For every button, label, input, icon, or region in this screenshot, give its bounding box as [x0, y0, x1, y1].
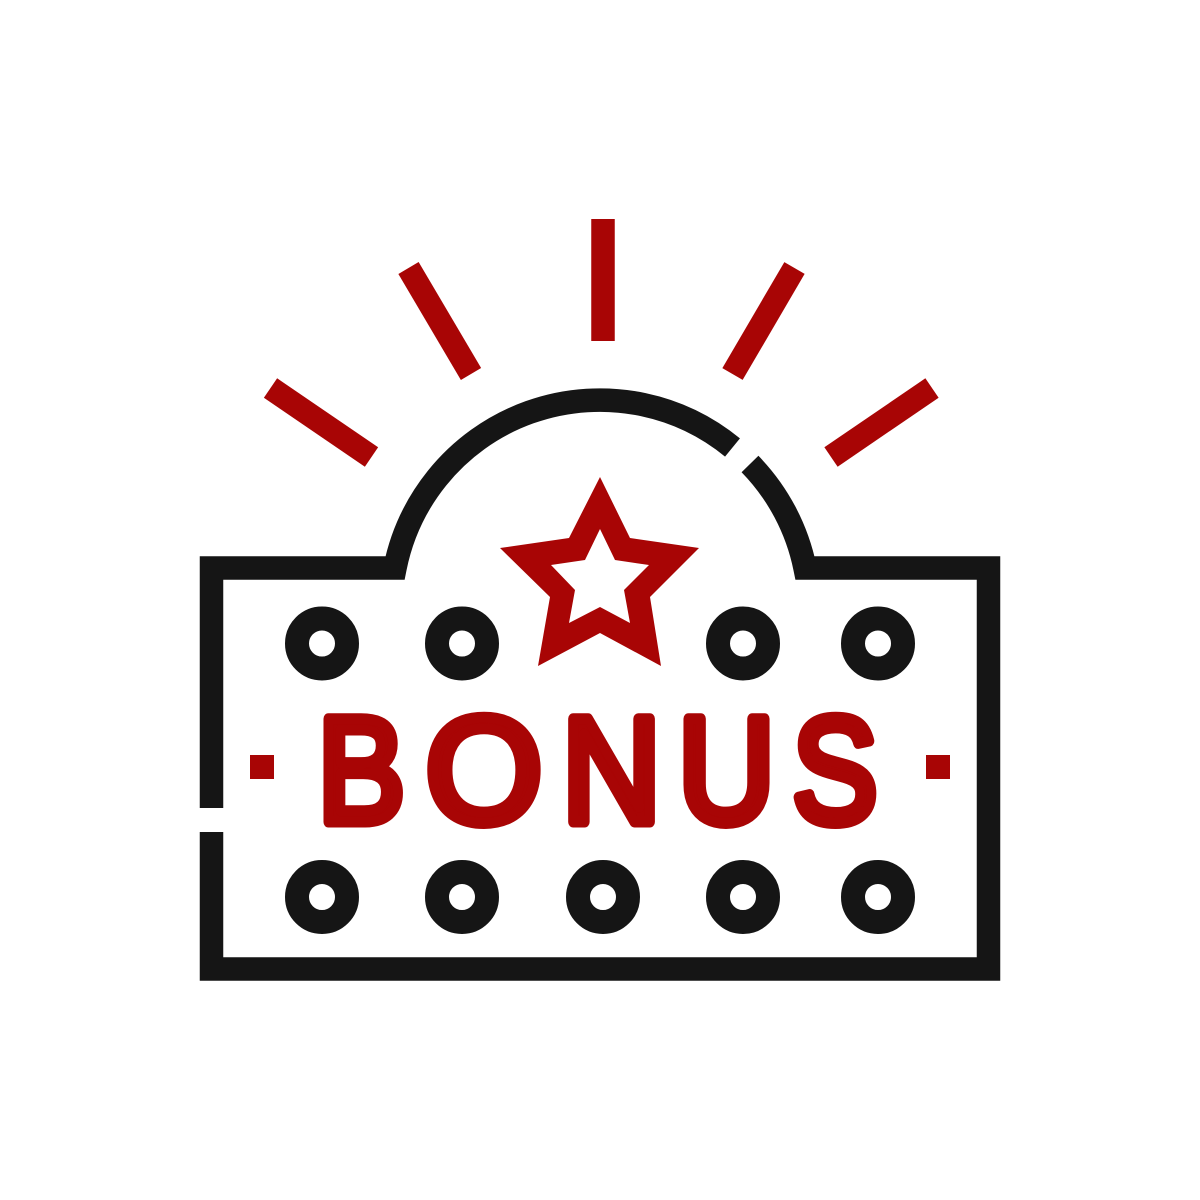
bonus lettering: B — [318, 686, 405, 854]
light rays — [270, 219, 932, 457]
bonus lettering: O — [426, 686, 542, 854]
bonus lettering — [318, 686, 878, 855]
bonus lettering: N — [562, 687, 661, 854]
bonus lettering: S — [792, 687, 878, 854]
sign outline with dome — [212, 400, 988, 969]
left square marker — [250, 755, 274, 779]
top row of lights — [297, 618, 903, 668]
icon: star — [500, 477, 699, 666]
bonus lettering: U — [678, 687, 775, 855]
bottom row of lights — [297, 872, 903, 922]
right square marker — [926, 755, 950, 779]
